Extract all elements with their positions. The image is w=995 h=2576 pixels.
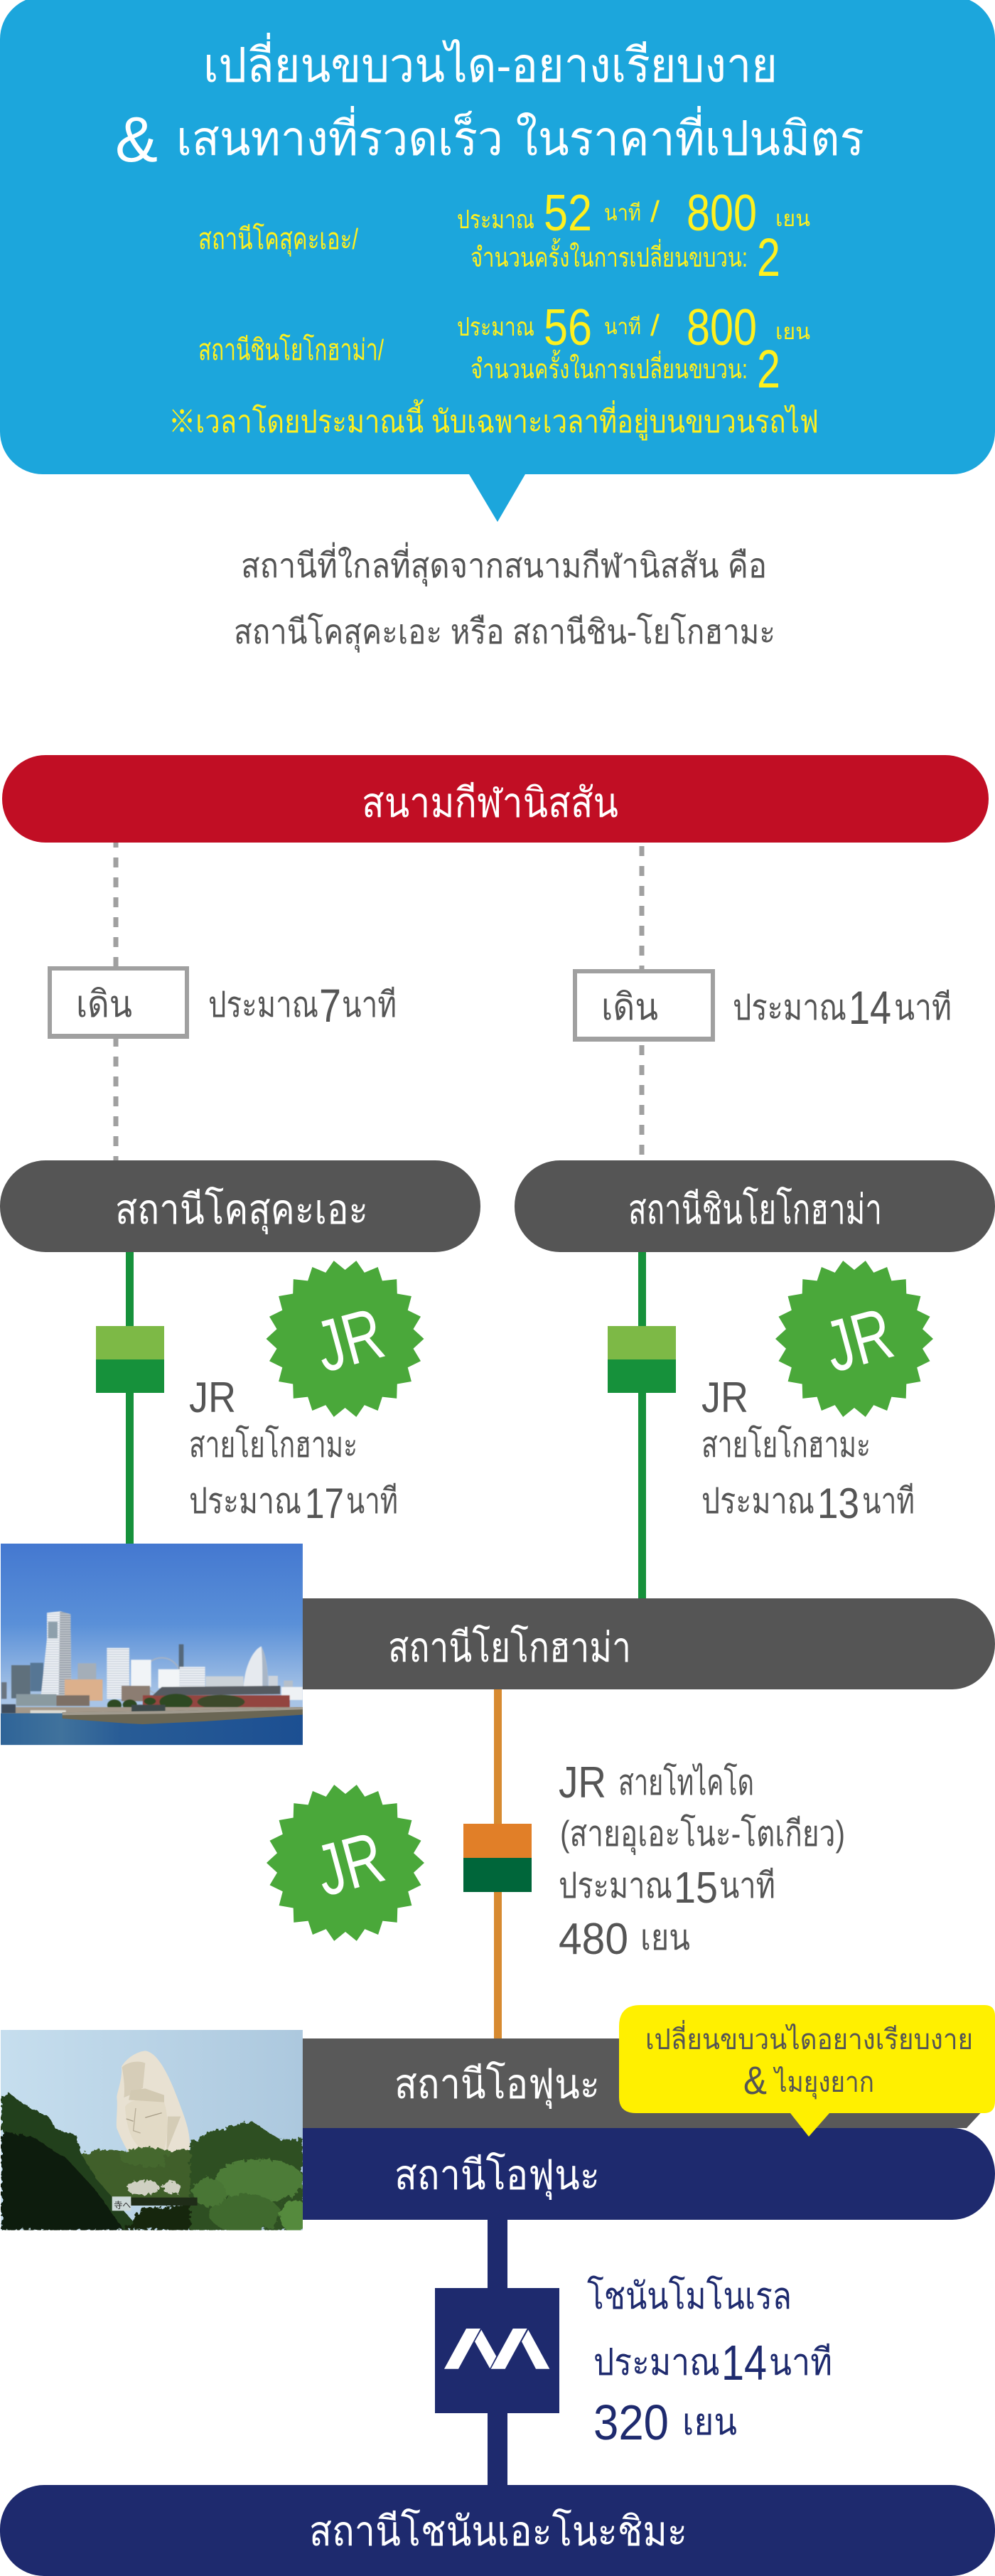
station pill: Kosugaya: [0, 1160, 480, 1252]
text block: Kosugaya route summary: จำนวนครั้งในการเปลี่ยนขบวน:: [470, 237, 748, 273]
text block: nearest station caption: [234, 542, 775, 653]
text block: JR Yokohama line right: ประมาณ: [701, 1481, 814, 1521]
monorail line: [435, 2220, 559, 2485]
walk time left: 7: [319, 979, 341, 1032]
text block: Shin-Yokohama route summary: 56: [544, 299, 592, 356]
callout: yellow transfer note: เปลี่ยนขบวนไดอยางเรียบงาย: [645, 2020, 973, 2056]
callout: yellow transfer note: &: [743, 2058, 767, 2102]
photo: Ofuna Kannon statue: 寺へ: [114, 2198, 131, 2211]
text block: Shin-Yokohama route summary: 800: [687, 299, 757, 356]
heading: bubble title: [115, 33, 864, 176]
text block: Shonan Monorail details: ประมาณ: [593, 2342, 720, 2383]
icon: Shonan Monorail logo: [435, 2288, 559, 2413]
text block: Shin-Yokohama route summary: สถานีชินโยโกฮาม่า/: [198, 333, 384, 366]
text block: Shonan Monorail details: [587, 2275, 832, 2450]
text block: JR Tokaido line details: ประมาณ: [559, 1866, 672, 1906]
text block: JR Yokohama line left: [189, 1374, 398, 1527]
walk time left: ประมาณ: [208, 985, 318, 1025]
photo: Yokohama skyline: [1, 1544, 303, 1745]
icon: JR badge centre: [267, 1785, 424, 1941]
text block: Kosugaya route summary: /: [650, 195, 660, 228]
JR line right: [608, 1252, 676, 1600]
text block: JR Tokaido line details: นาที: [719, 1866, 775, 1906]
walk box left: [48, 966, 189, 1039]
orange JR Tokaido line: [463, 1689, 532, 2038]
walk time left: [208, 979, 397, 1032]
walking dashed connector right: [640, 846, 644, 1160]
icon: JR badge left: [266, 1261, 424, 1417]
text block: JR Yokohama line right: นาที: [862, 1481, 915, 1521]
text block: Kosugaya route summary: ประมาณ: [457, 205, 534, 234]
photo: Ofuna Kannon statue: [1, 2030, 308, 2233]
text block: Kosugaya route summary: สถานีโคสุคะเอะ/: [198, 223, 358, 257]
heading: bubble title: &: [115, 105, 158, 176]
text block: JR Tokaido line details: (สายอุเอะโนะ-โตเกียว): [560, 1814, 845, 1855]
text block: JR Yokohama line left: นาที: [346, 1481, 398, 1521]
text block: JR Yokohama line left: สายโยโกฮามะ: [189, 1425, 357, 1465]
text block: JR Yokohama line left: JR: [189, 1374, 236, 1421]
text block: JR Yokohama line right: 13: [817, 1480, 859, 1527]
text block: Shonan Monorail details: เยน: [682, 2402, 737, 2443]
text block: Shin-Yokohama route summary: ประมาณ: [457, 312, 534, 341]
JR line left: [96, 1252, 164, 1545]
icon: JR badge right: JR: [816, 1292, 901, 1388]
text block: JR Yokohama line right: [701, 1374, 915, 1527]
text block: Shin-Yokohama route summary: เยน: [775, 319, 810, 344]
text block: Shin-Yokohama route summary: 2: [757, 339, 780, 400]
text block: Kosugaya route summary: เยน: [775, 206, 810, 231]
text block: JR Tokaido line details: เยน: [640, 1918, 690, 1957]
callout: yellow transfer note: ไมยุงยาก: [773, 2066, 874, 2100]
text block: Shin-Yokohama route summary: /: [650, 309, 660, 342]
text block: Shin-Yokohama route summary: [198, 299, 810, 400]
station pill: Shin-Yokohama: [515, 1160, 995, 1252]
station bar: Ofuna JR: [302, 2038, 995, 2128]
text block: JR Yokohama line right: JR: [701, 1374, 748, 1421]
walk time right: 14: [849, 981, 891, 1034]
text block: Shonan Monorail details: โชนันโมโนเรล: [587, 2275, 792, 2317]
callout: yellow transfer note: [619, 2005, 995, 2137]
station pill: Nissan Stadium: [2, 755, 989, 843]
icon: JR badge centre: JR: [307, 1816, 392, 1912]
text block: JR Tokaido line details: [559, 1758, 845, 1964]
text block: Shonan Monorail details: 14: [721, 2335, 767, 2390]
walk time right: [733, 981, 952, 1034]
heading: bubble title: เปลี่ยนขบวนได-อยางเรียบงาย: [203, 33, 778, 92]
walk time left: นาที: [342, 985, 397, 1025]
text block: Kosugaya route summary: นาที: [604, 201, 641, 225]
walk box right: [573, 969, 715, 1042]
walk box left: เดิน: [76, 984, 132, 1025]
text block: Shin-Yokohama route summary: นาที: [604, 314, 641, 339]
walking dashed connector left: [114, 843, 118, 1160]
walk time right: นาที: [894, 988, 952, 1027]
icon: JR badge left: JR: [307, 1292, 392, 1388]
text block: Shonan Monorail details: นาที: [769, 2342, 832, 2383]
station bar: Ofuna monorail: สถานีโอฟุนะ: [394, 2152, 600, 2201]
station pill: Shonan-Enoshima: [0, 2485, 995, 2576]
text block: Kosugaya route summary: 2: [757, 228, 780, 288]
text block: Kosugaya route summary: 800: [687, 185, 757, 242]
text block: Shin-Yokohama route summary: จำนวนครั้งในการเปลี่ยนขบวน:: [470, 349, 748, 385]
station bar: Yokohama: สถานีโยโกฮาม่า: [388, 1624, 631, 1671]
text block: JR Yokohama line left: 17: [305, 1480, 344, 1527]
station pill: Shin-Yokohama: สถานีชินโยโกฮาม่า: [628, 1186, 882, 1233]
walk time right: ประมาณ: [733, 988, 846, 1027]
text block: time note: ※เวลาโดยประมาณนี้ นับเฉพาะเวลาที่อยู่บนขบวนรถไฟ: [168, 399, 819, 441]
text block: nearest station caption: สถานีที่ใกลที่สุดจากสนามกีฬานิสสัน คือ: [241, 542, 767, 587]
heading: bubble title: เสนทางที่รวดเร็ว ในราคาที่เปนมิตร: [176, 106, 864, 166]
station bar: Yokohama: [302, 1598, 995, 1689]
icon: JR badge right: [775, 1261, 933, 1417]
text block: JR Tokaido line details: 15: [674, 1864, 718, 1913]
text block: Kosugaya route summary: 52: [544, 185, 592, 242]
text block: JR Tokaido line details: สายโทไคโด: [618, 1763, 754, 1802]
text block: Kosugaya route summary: [198, 185, 810, 288]
text block: JR Tokaido line details: 480: [559, 1915, 628, 1964]
text block: JR Tokaido line details: JR: [559, 1758, 606, 1807]
station bar: Ofuna monorail: [302, 2128, 995, 2220]
text block: nearest station caption: สถานีโคสุคะเอะ หรือ สถานีชิน-โยโกฮามะ: [234, 612, 775, 653]
station pill: Kosugaya: สถานีโคสุคะเอะ: [115, 1186, 368, 1235]
callout: blue speech bubble: [0, 0, 995, 522]
station pill: Shonan-Enoshima: สถานีโชนันเอะโนะชิมะ: [309, 2508, 687, 2555]
walk box right: เดิน: [601, 987, 658, 1028]
text block: JR Yokohama line left: ประมาณ: [189, 1481, 301, 1521]
text block: JR Yokohama line right: สายโยโกฮามะ: [701, 1425, 871, 1465]
text block: Shonan Monorail details: 320: [593, 2395, 669, 2450]
station bar: Ofuna JR: สถานีโอฟุนะ: [394, 2061, 600, 2110]
station pill: Nissan Stadium: สนามกีฬานิสสัน: [362, 780, 618, 826]
